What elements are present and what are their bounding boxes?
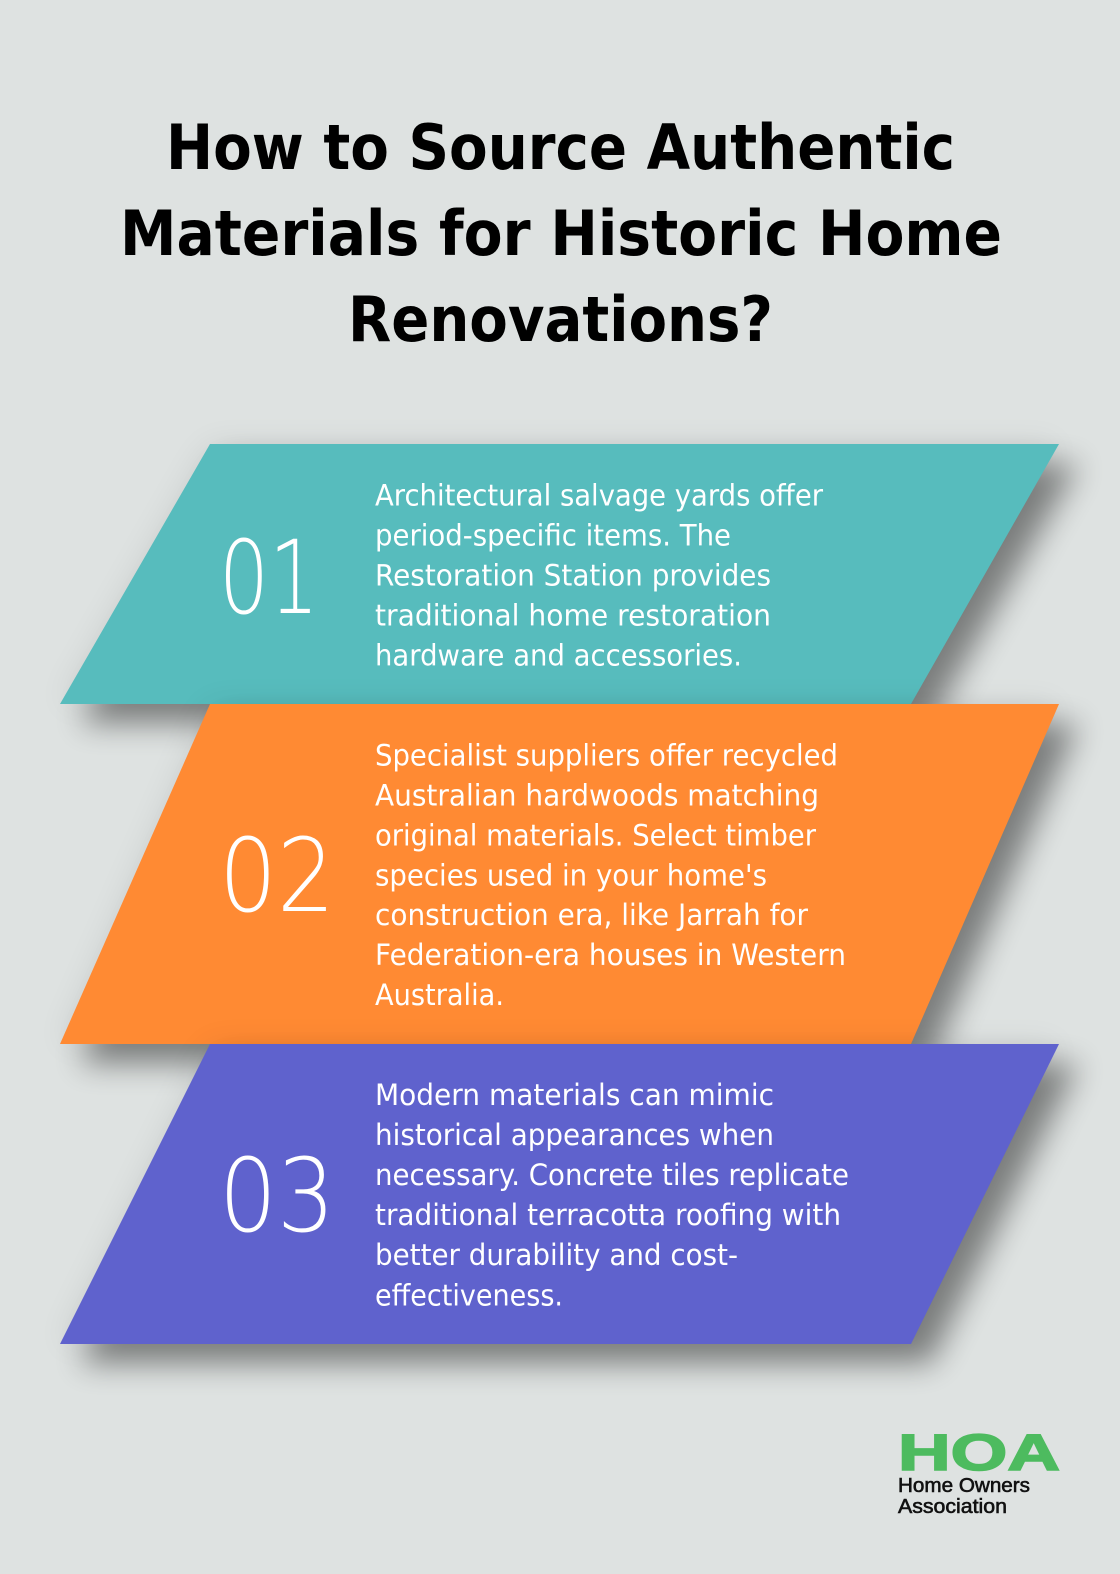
panel: step 02 xyxy=(60,704,1079,1064)
text: step 01: Restoration Station provides xyxy=(375,558,771,592)
text: step 03: Modern materials can mimic xyxy=(375,1078,774,1112)
title: Renovations? xyxy=(348,283,773,356)
text: step 01: hardware and accessories. xyxy=(375,638,742,672)
text: step 02: original materials. Select timber xyxy=(375,818,816,852)
text: step 02: Australian hardwoods matching xyxy=(375,778,819,812)
text: step 01: period-specific items. The xyxy=(375,518,731,552)
text: step 01 xyxy=(375,478,823,672)
text: step 02: Australia. xyxy=(375,978,504,1012)
logo: HOA Home Owners Association: Association xyxy=(898,1496,1007,1518)
text: step 02: Specialist suppliers offer recycled xyxy=(375,738,838,772)
number 01: 01 xyxy=(219,519,319,638)
logo: HOA Home Owners Association xyxy=(898,1424,1060,1518)
panel: step 03 xyxy=(60,1044,1079,1364)
panel: step 01 xyxy=(60,444,1079,724)
text: step 03 xyxy=(375,1078,849,1312)
text: step 01: traditional home restoration xyxy=(375,598,771,632)
logo: HOA Home Owners Association: HOA xyxy=(898,1424,1060,1481)
text: step 03: traditional terracotta roofing with xyxy=(375,1198,841,1232)
text: step 03: better durability and cost- xyxy=(375,1238,738,1272)
text: step 01: Architectural salvage yards offer xyxy=(375,478,823,512)
text: step 02: Federation-era houses in Western xyxy=(375,938,846,972)
number 03: 03 xyxy=(219,1137,335,1256)
text: step 02: construction era, like Jarrah for xyxy=(375,898,808,932)
logo: HOA Home Owners Association: Home Owners xyxy=(898,1475,1030,1497)
number 02: 02 xyxy=(219,817,335,936)
text: step 03: necessary. Concrete tiles replicate xyxy=(375,1158,849,1192)
text: step 03: historical appearances when xyxy=(375,1118,774,1152)
title: How to Source Authentic xyxy=(166,111,955,184)
title: Materials for Historic Home xyxy=(120,197,1002,270)
text: step 02: species used in your home's xyxy=(375,858,767,892)
text: step 02 xyxy=(375,738,846,1012)
text: step 03: effectiveness. xyxy=(375,1278,563,1312)
title xyxy=(120,111,1002,356)
